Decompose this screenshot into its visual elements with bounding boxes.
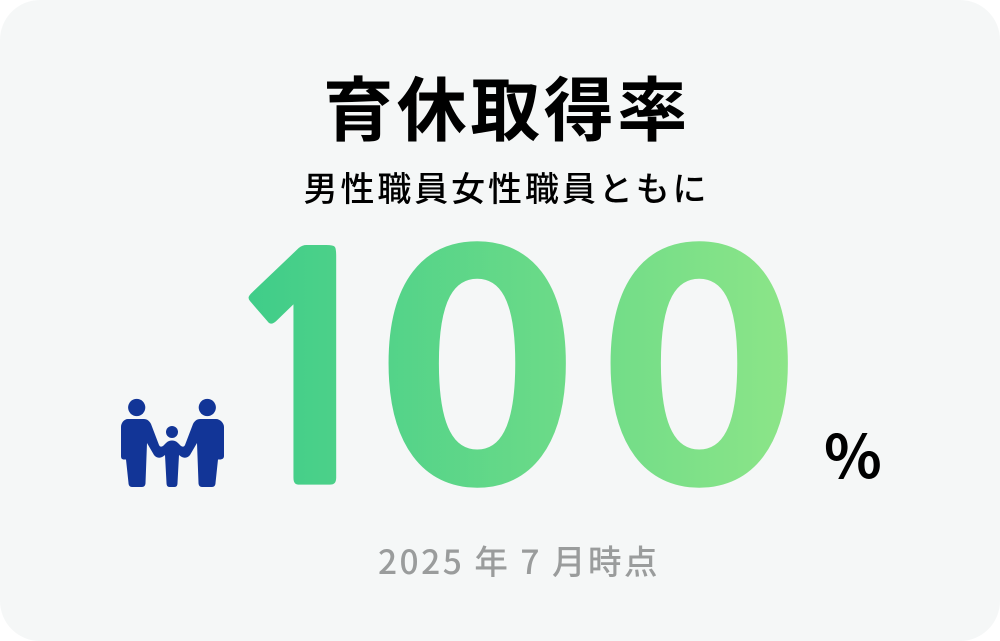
date note: 2025 年 7 月時点 [378, 535, 660, 584]
icon: family [121, 399, 224, 487]
title: 育休取得率 [323, 55, 691, 156]
percent sign: % [824, 409, 882, 496]
big number: 100: 1 [218, 220, 400, 527]
big number: 100: 0 [596, 114, 802, 575]
subtitle: 男性職員女性職員ともに [304, 162, 709, 211]
big number: 100 [218, 114, 802, 575]
big number: 100: 0 [374, 114, 580, 575]
